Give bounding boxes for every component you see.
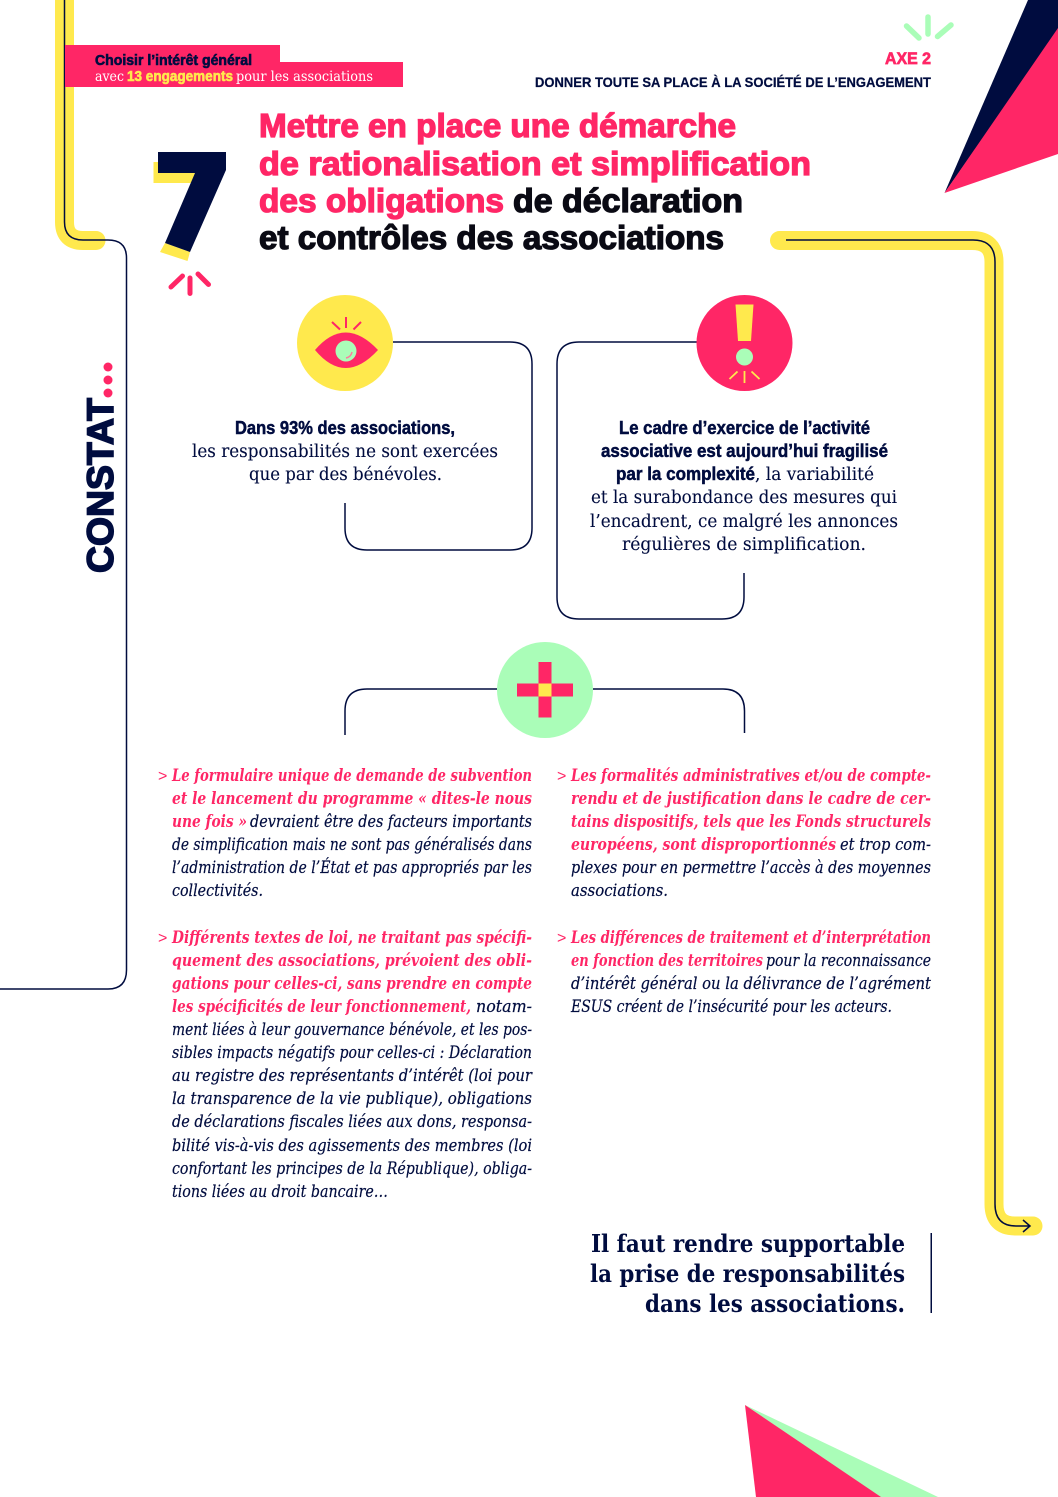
right column: first point: > bbox=[557, 768, 566, 785]
title bbox=[259, 107, 811, 256]
header band title: Choisir l’intérêt général bbox=[95, 53, 252, 69]
conclusion callout bbox=[590, 1229, 932, 1318]
text block: 93% of associations bbox=[192, 418, 498, 485]
text block: complexity: associative est aujourd’hui fragilisé bbox=[601, 441, 888, 461]
title: de rationalisation et simplification bbox=[259, 145, 811, 182]
left column: first point bbox=[158, 766, 532, 900]
right column: second point: Les différences de traitement et d’interprétation bbox=[570, 928, 931, 947]
icon: green rays bbox=[906, 17, 951, 38]
conclusion callout: la prise de responsabilités bbox=[590, 1259, 905, 1288]
conclusion callout: dans les associations. bbox=[645, 1289, 905, 1318]
left column: second point: confortant les principes de la République), obliga- bbox=[172, 1159, 532, 1178]
left column: first point: collectivités. bbox=[172, 881, 263, 900]
right column: first point: tains dispositifs, tels que les Fonds structurels bbox=[571, 812, 931, 831]
icon: exclamation mark bbox=[696, 295, 792, 391]
decorative corner triangles top right bbox=[944, 0, 1058, 193]
right column: first point: associations. bbox=[571, 881, 668, 900]
title: des obligations bbox=[259, 182, 504, 219]
left column: second point: les spécificités de leur fonctionnement, bbox=[172, 997, 471, 1016]
icon: pink rays bbox=[171, 274, 208, 294]
decorative corner triangles bottom bbox=[745, 1405, 938, 1497]
text block: 93% of associations: les responsabilités ne sont exercées bbox=[192, 442, 498, 462]
left column: first point: de simplification mais ne sont pas généralisés dans bbox=[172, 835, 532, 854]
text block: complexity: et la surabondance des mesures qui bbox=[591, 488, 897, 508]
left column: first point: et le lancement du programme « dites-le nous bbox=[172, 789, 532, 808]
left column: first point: > bbox=[158, 768, 167, 785]
title: Mettre en place une démarche bbox=[259, 107, 736, 144]
axis tag bbox=[535, 17, 951, 90]
header band subtitle: avec bbox=[95, 69, 124, 85]
left column: second point: au registre des représentants d’intérêt (loi pour bbox=[172, 1066, 533, 1085]
left column: second point: > bbox=[158, 930, 167, 947]
left column: first point: une fois » bbox=[172, 812, 247, 831]
left column: second point: sibles impacts négatifs pour celles-ci : Déclaration bbox=[172, 1043, 532, 1062]
right column: first point: Les formalités administratives et/ou de compte- bbox=[570, 766, 931, 785]
right column: second point: pour la reconnaissance bbox=[766, 951, 931, 970]
text block: complexity bbox=[590, 418, 898, 555]
right column: second point: en fonction des territoires bbox=[571, 951, 763, 970]
right column: second point: d’intérêt général ou la délivrance de l’agrément bbox=[571, 974, 931, 993]
text block: complexity: l’encadrent, ce malgré les annonces bbox=[590, 512, 898, 532]
panel: volunteers finding bbox=[192, 295, 532, 550]
axis title: DONNER TOUTE SA PLACE À LA SOCIÉTÉ DE L’ENGAGEMENT bbox=[535, 74, 931, 90]
right yellow connector with arrow bbox=[780, 240, 1033, 1232]
conclusion callout: Il faut rendre supportable bbox=[591, 1229, 905, 1258]
header band subtitle bbox=[95, 69, 373, 85]
left column: second point bbox=[158, 928, 533, 1201]
right column: second point: ESUS créent de l’insécurité pour les acteurs. bbox=[570, 997, 892, 1016]
header band bbox=[65, 45, 403, 87]
title: de déclaration bbox=[513, 182, 743, 219]
left column: first point: l’administration de l’État et pas appropriés par les bbox=[172, 857, 532, 877]
left column: first point: devraient être des facteurs importants bbox=[250, 812, 532, 831]
left column: second point: notam- bbox=[476, 997, 532, 1016]
right column: first point: rendu et de justification dans le cadre de cer- bbox=[571, 789, 931, 808]
text block: 93% of associations: que par des bénévoles. bbox=[249, 465, 442, 485]
right column: first point: et trop com- bbox=[840, 835, 931, 854]
left column: first point: Le formulaire unique de demande de subvention bbox=[171, 766, 532, 785]
header band subtitle: 13 engagements bbox=[127, 69, 233, 85]
left column: second point: la transparence de la vie publique), obligations bbox=[172, 1089, 532, 1108]
bracket with plus icon bbox=[345, 642, 744, 738]
left column: second point: bilité vis-à-vis des agissements des membres (loi bbox=[172, 1136, 532, 1155]
right column: first point: plexes pour en permettre l’accès à des moyennes bbox=[571, 858, 931, 877]
left column: second point: Différents textes de loi, ne traitant pas spécifi- bbox=[171, 928, 532, 947]
left column: second point: tions liées au droit bancaire… bbox=[172, 1182, 388, 1201]
right column: second point bbox=[557, 928, 931, 1016]
text block: complexity: Le cadre d’exercice de l’activité bbox=[619, 418, 870, 438]
left column: second point: quement des associations, prévoient des obli- bbox=[172, 951, 532, 970]
title: et contrôles des associations bbox=[259, 219, 724, 256]
text block: 93% of associations: Dans 93% des associations, bbox=[235, 418, 455, 438]
icon: eye bbox=[297, 295, 393, 391]
left column: second point: ment liées à leur gouvernance bénévole, et les pos- bbox=[172, 1020, 532, 1039]
number 7 bbox=[154, 152, 226, 294]
text block: complexity: par la complexité bbox=[616, 464, 755, 484]
text block: complexity: , la variabilité bbox=[755, 465, 874, 485]
left yellow connector with navy line bbox=[0, 0, 126, 989]
header band subtitle: pour les associations bbox=[236, 69, 373, 85]
right column: first point: européens, sont disproportionnés bbox=[571, 835, 836, 854]
icon: plus bbox=[497, 642, 593, 738]
left column: second point: gations pour celles-ci, sans prendre en compte bbox=[172, 974, 532, 993]
axis number: AXE 2 bbox=[885, 50, 931, 68]
right column: second point: > bbox=[557, 930, 566, 947]
vertical heading: constat: CONSTAT bbox=[80, 398, 121, 573]
left column: second point: de déclarations fiscales liées aux dons, responsa- bbox=[172, 1112, 532, 1131]
right column: first point bbox=[557, 766, 931, 900]
text block: complexity: régulières de simplification. bbox=[622, 535, 866, 555]
panel: regulatory complexity finding bbox=[557, 295, 898, 619]
